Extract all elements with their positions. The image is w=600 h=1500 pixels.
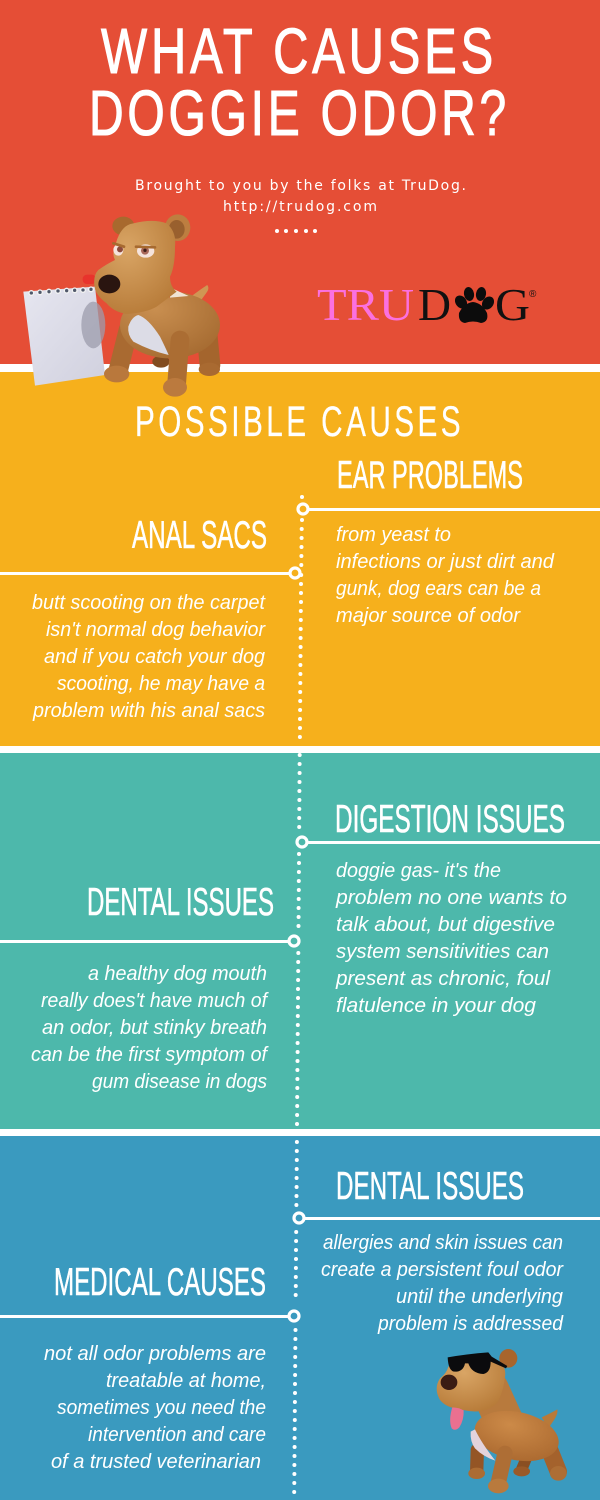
heading: anal sacs: ANAL SACS — [132, 514, 267, 557]
text: allergies: until the underlying — [396, 1286, 563, 1308]
text: anal sacs — [32, 592, 266, 722]
subtitle credit: http://trudog.com — [223, 199, 377, 215]
text: anal sacs: scooting, he may have a — [57, 673, 265, 695]
text: digestion issues: flatulence in your dog — [336, 995, 536, 1017]
text: digestion issues — [335, 860, 567, 1017]
dotted timeline — [292, 495, 304, 1494]
section: ear problems — [298, 454, 600, 627]
text: ear problems — [336, 524, 555, 627]
text: digestion issues: problem no one wants to — [335, 887, 567, 909]
text: anal sacs: butt scooting on the carpet — [32, 592, 266, 614]
panel: header background — [0, 0, 600, 364]
logo: TruDog: TRU — [317, 279, 414, 330]
text: digestion issues: doggie gas- it's the — [336, 860, 501, 882]
text: medical causes: of a trusted veterinarian — [51, 1451, 261, 1473]
section: dental issues right — [294, 1165, 600, 1335]
text: dental issues: a healthy dog mouth — [88, 963, 267, 985]
text: medical causes: treatable at home, — [106, 1370, 266, 1392]
panel: possible causes yellow band — [0, 372, 600, 746]
section: anal sacs — [0, 514, 300, 722]
text: ear problems: major source of odor — [336, 605, 521, 627]
text: ear problems: gunk, dog ears can be a — [336, 578, 541, 600]
text: medical causes: intervention and care — [88, 1424, 266, 1446]
heading: dental issues: DENTAL ISSUES — [87, 881, 274, 924]
text: anal sacs: isn't normal dog behavior — [46, 619, 266, 641]
text: ear problems: from yeast to — [336, 524, 451, 546]
icon: dog with sunglasses — [437, 1349, 567, 1493]
text: allergies — [321, 1232, 564, 1335]
text: allergies: create a persistent foul odor — [321, 1259, 564, 1281]
subtitle credit: Brought to you by the folks at TruDog. — [135, 178, 466, 194]
text: medical causes: not all odor problems are — [44, 1343, 266, 1365]
heading: medical causes: MEDICAL CAUSES — [54, 1261, 266, 1304]
text: medical causes — [44, 1343, 266, 1473]
logo: TruDog: ® — [529, 289, 537, 300]
section: digestion issues — [297, 798, 600, 1017]
text: dental issues: gum disease in dogs — [92, 1071, 267, 1093]
text: anal sacs: and if you catch your dog — [44, 646, 265, 668]
text: digestion issues: talk about, but digestive — [336, 914, 555, 936]
text: dental issues: an odor, but stinky breath — [42, 1017, 267, 1039]
panel: blue band — [0, 1136, 600, 1500]
dots divider — [275, 229, 317, 233]
text: medical causes: sometimes you need the — [57, 1397, 266, 1419]
section: dental issues left — [0, 881, 299, 1093]
text: dental issues: can be the first symptom of — [31, 1044, 269, 1066]
text: anal sacs: problem with his anal sacs — [32, 700, 265, 722]
text: ear problems: infections or just dirt and — [336, 551, 555, 573]
text: allergies: problem is addressed — [377, 1313, 564, 1335]
text: digestion issues: present as chronic, foul — [335, 968, 551, 990]
heading: possible causes: POSSIBLE CAUSES — [135, 398, 464, 446]
icon: dog with notepad — [23, 214, 220, 397]
text: dental issues: really does't have much of — [41, 990, 269, 1012]
logo: TruDog — [317, 279, 537, 330]
logo: TruDog: D — [418, 279, 451, 330]
logo: TruDog: G — [495, 279, 530, 330]
panel: teal band — [0, 753, 600, 1129]
text: dental issues — [31, 963, 269, 1093]
section: medical causes — [0, 1261, 299, 1473]
text: digestion issues: system sensitivities can — [336, 941, 549, 963]
title — [89, 15, 510, 149]
text: allergies: allergies and skin issues can — [323, 1232, 563, 1254]
subtitle credit — [135, 178, 466, 215]
